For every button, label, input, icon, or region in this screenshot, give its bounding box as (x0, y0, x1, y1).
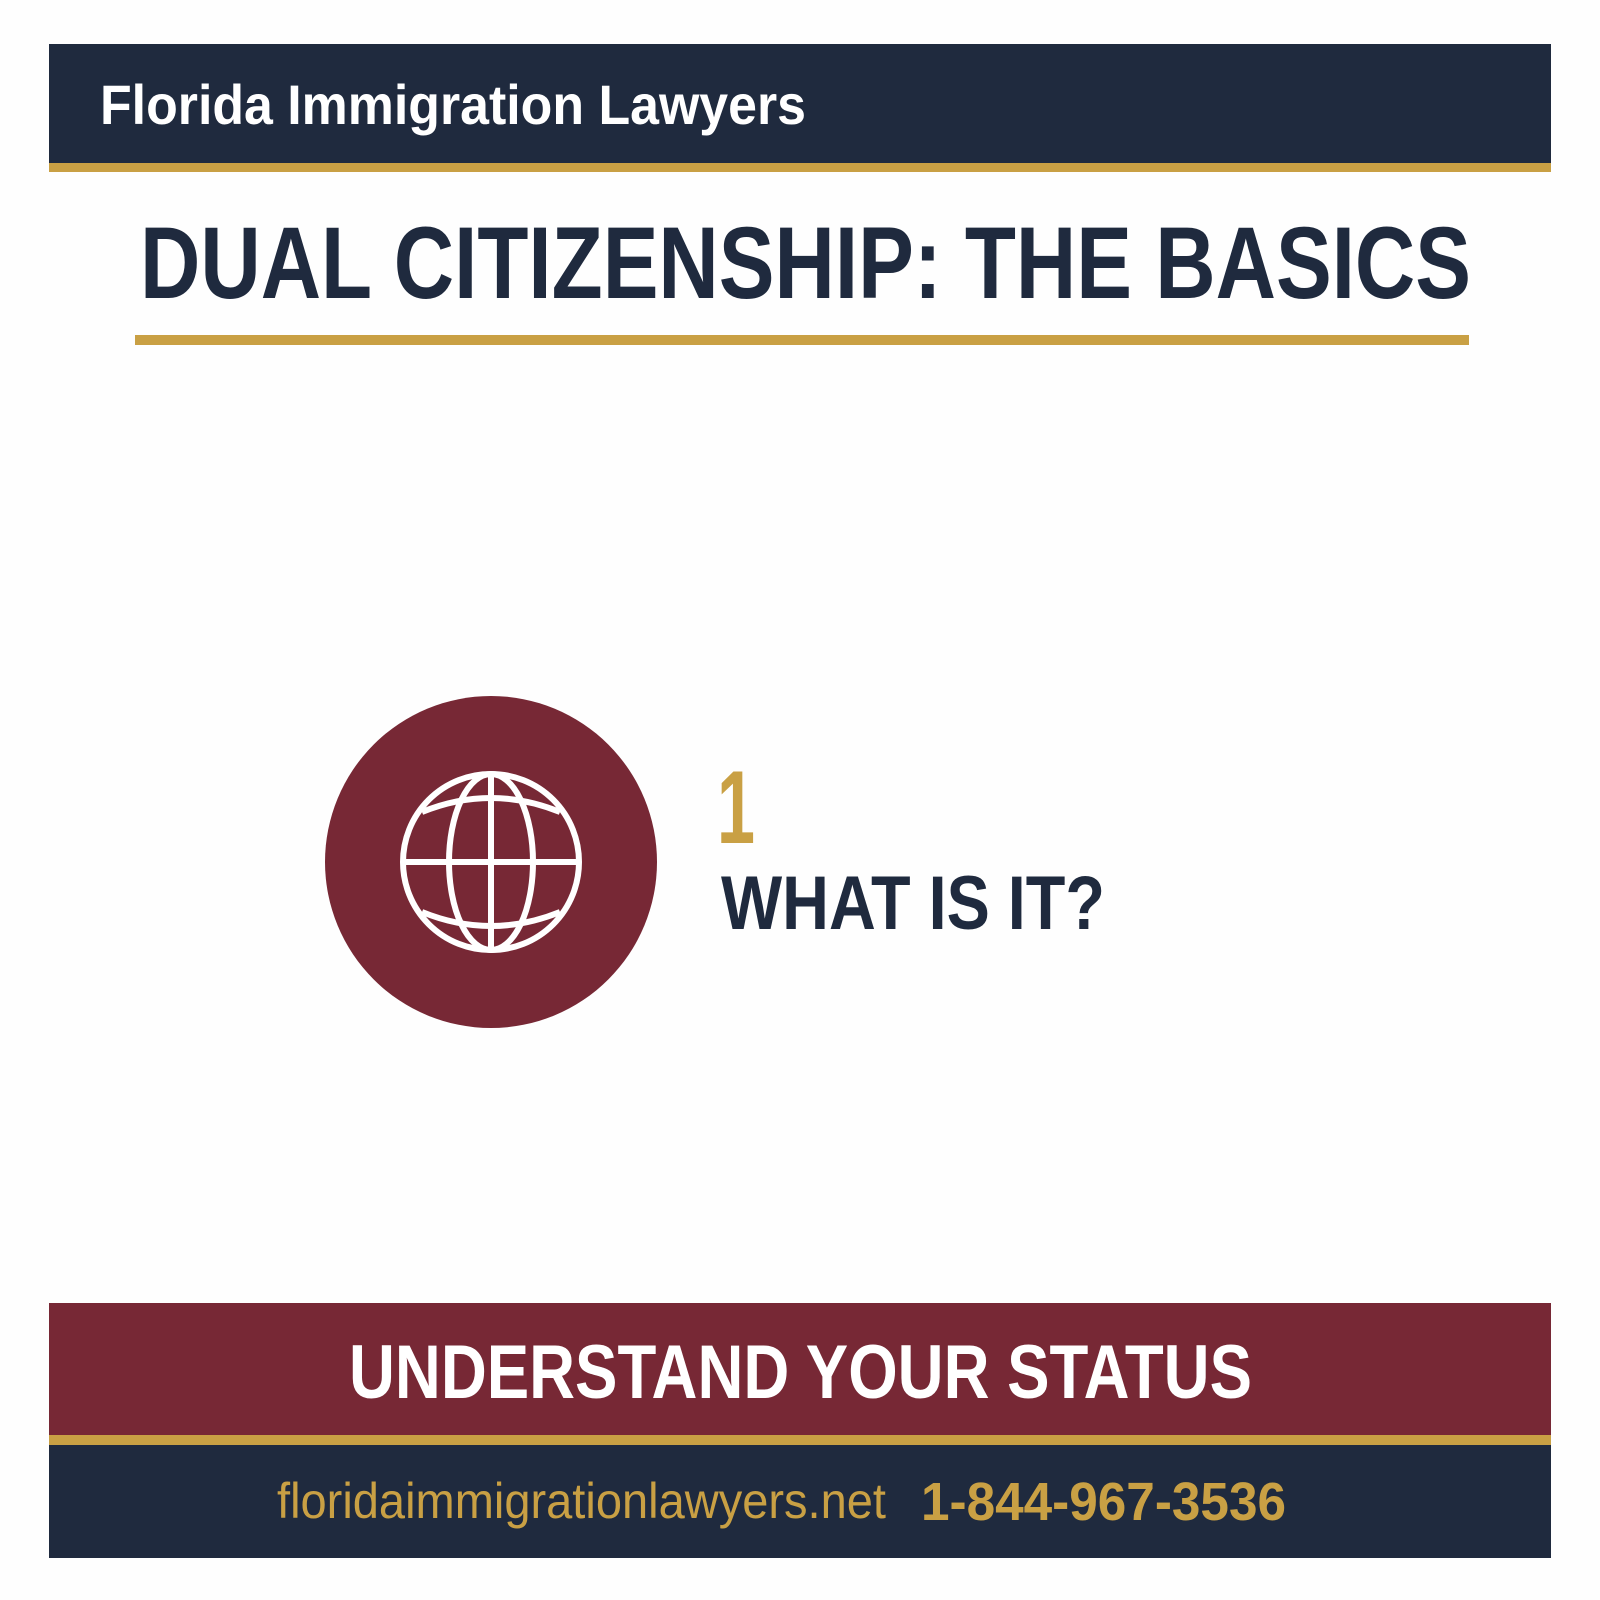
footer contact bar: floridaimmigrationlawyers.net (277, 1473, 886, 1529)
header bar (49, 44, 1551, 172)
step heading: WHAT IS IT? (721, 861, 1105, 946)
banner: understand your status: UNDERSTAND YOUR STATUS (349, 1330, 1252, 1415)
banner: understand your status (49, 1303, 1551, 1445)
step number: 1 (717, 750, 755, 866)
icon: globe circle (325, 696, 657, 1028)
footer contact bar (49, 1445, 1551, 1558)
footer contact bar: 1-844-967-3536 (921, 1472, 1286, 1532)
header text: Florida Immigration Lawyers (100, 73, 806, 136)
